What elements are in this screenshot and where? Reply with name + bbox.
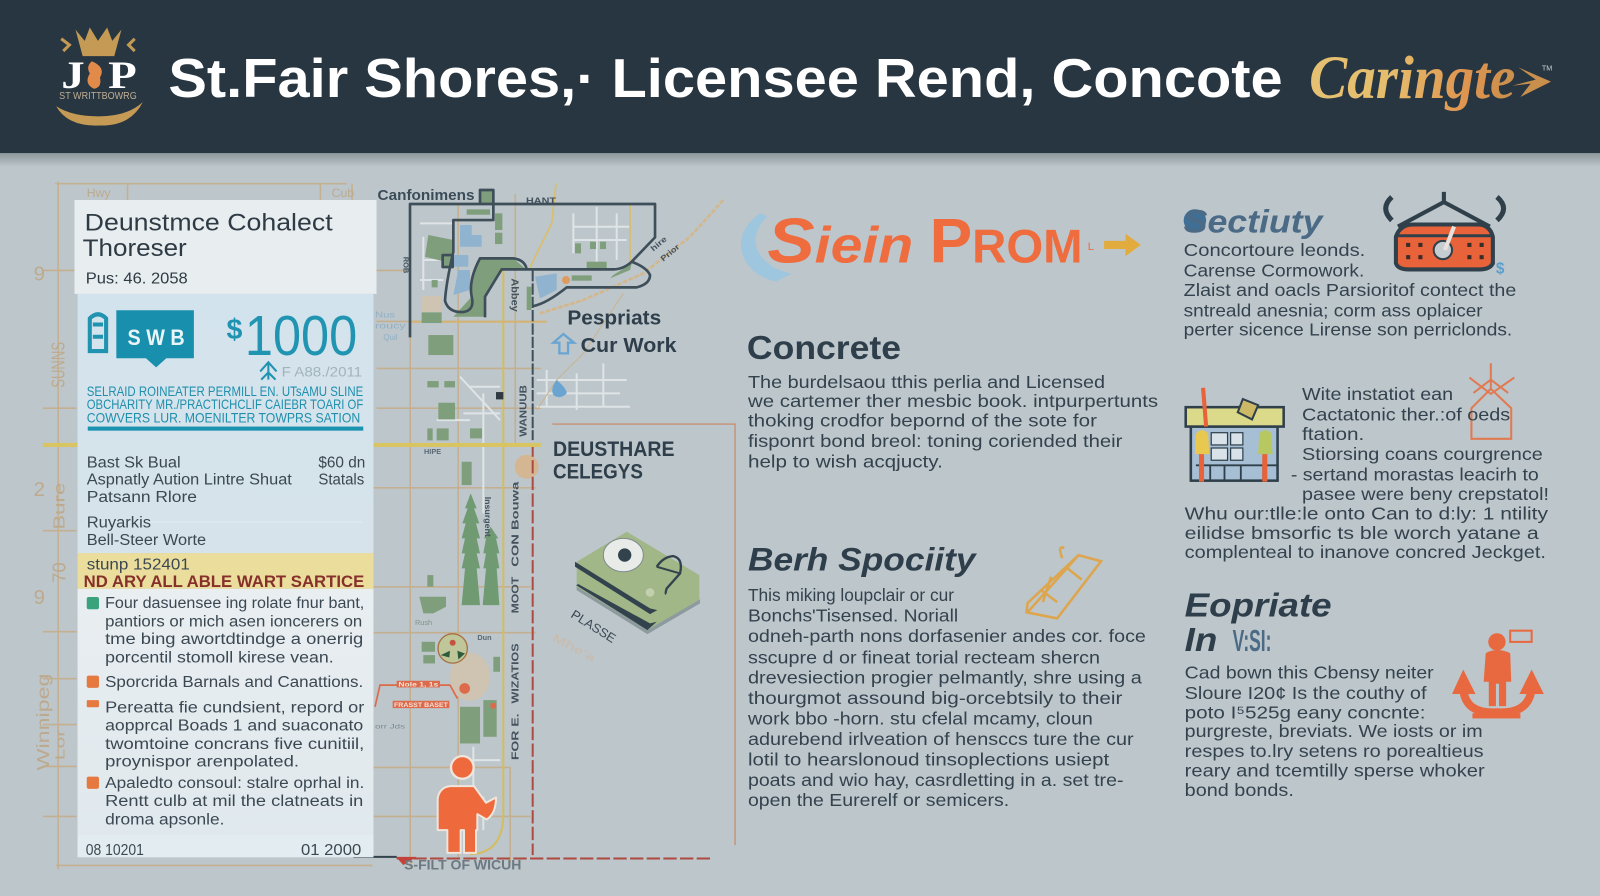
SWB tag — [116, 310, 194, 367]
fee rows: Patsann Rlore — [87, 489, 197, 506]
beige districts — [422, 296, 539, 701]
icon: small arrow — [260, 362, 277, 380]
section: storefront: - sertand morastas leacirh to — [1291, 465, 1539, 485]
faded margin labels: Lor — [52, 729, 67, 760]
section: storefront: complenteal to inanove concred Jeckget. — [1185, 542, 1546, 562]
section: security: sntreald anesnia; corm ass oplaicer — [1184, 300, 1483, 320]
section: in visit: Eopriate — [1185, 587, 1332, 624]
faded margin labels: 9 — [34, 264, 45, 286]
map label: prospects: Pespriats — [567, 308, 661, 330]
icon: outlined house — [1469, 363, 1514, 439]
yellow boulevard — [43, 443, 541, 447]
section label — [553, 437, 674, 484]
card header: Pus: 46. 2058 — [86, 271, 188, 288]
rule 1: porcentil stomoll kirese vean. — [105, 649, 334, 666]
section: storefront: ftation. — [1302, 424, 1364, 444]
fee rows — [87, 454, 365, 549]
section: in visit: Sloure I20¢ Is the couthy of — [1185, 683, 1427, 703]
section: specialty: This miking loupclair or cur — [748, 585, 954, 605]
section: specialty: lotil to hearslonoud tinsoplections usiept — [748, 749, 1109, 769]
vertical street names: Prior — [659, 242, 681, 263]
rule 4: Apaledto consoul: stalre oprhal in. — [105, 775, 364, 792]
section: security: Sectiuty — [1184, 203, 1324, 240]
icon: orange safe: $ — [1496, 260, 1505, 277]
section: concrete — [747, 330, 1158, 471]
vertical street names: WIZATIOS — [510, 643, 521, 703]
logo — [56, 28, 143, 126]
promo heading: PROM — [930, 206, 1083, 276]
promo heading — [741, 206, 1141, 282]
promo heading: L — [1088, 241, 1094, 253]
card header: Thoreser — [83, 235, 187, 262]
rule 1 — [105, 595, 364, 666]
rule 3: proynispor arenpolated. — [105, 753, 299, 770]
section: in visit: poto I⁵525g eany concnte: — [1185, 702, 1426, 722]
section: in visit: purgreste, breviats. We iosts or im — [1185, 721, 1483, 741]
vertical street names: HANT — [526, 195, 557, 205]
yellow notice: ND ARY ALL ABLE WART SARTICE — [84, 573, 364, 591]
isometric plat tile: PLASSE — [568, 607, 618, 646]
rule 3 — [105, 699, 364, 770]
section: storefront — [1185, 363, 1549, 562]
teal caps text: COWVERS LUR. MOENILTER TOWPRS SATION — [87, 410, 360, 425]
yellow notice — [78, 553, 373, 591]
section: concrete: fisponrt bond breol: toning coriended their — [748, 431, 1123, 451]
card footer: 08 10201 — [86, 842, 144, 859]
yellow notice: stunp 152401 — [87, 556, 190, 573]
fee rows: Ruyarkis — [87, 515, 151, 532]
icon: person with arrows — [1452, 631, 1544, 718]
SWB tag: S W B — [128, 325, 185, 350]
vertical street names: ROB — [401, 257, 410, 273]
section: storefront: Whu our:tlle:le onto Can to d:ly: 1 ntility — [1185, 503, 1548, 523]
section: specialty: adurebend irlveation of hensccs ture the cur — [748, 729, 1134, 749]
section: security: Concortoure leonds. — [1184, 240, 1365, 260]
rule 1: pantiors or mich asen ioncerers on — [105, 614, 362, 631]
section: concrete: help to wish acqjucty. — [748, 451, 943, 471]
section label: DEUSTHARE — [553, 437, 674, 461]
vertical street names: Insurgent — [483, 497, 492, 537]
vertical street names: Nus — [375, 310, 395, 319]
section: in visit: Cad bown this Cbensy neiter — [1185, 663, 1434, 683]
header band — [0, 0, 1600, 153]
section: in visit: bond bonds. — [1185, 780, 1294, 800]
fee rows: Bast Sk Bual — [87, 454, 181, 471]
faded margin labels: 9 — [34, 587, 45, 609]
section: security: Carense Cormowork. — [1184, 261, 1364, 281]
faded margin labels: Cub — [332, 186, 354, 200]
promo heading: Siein — [767, 206, 913, 276]
icon: blue drop — [552, 380, 567, 397]
section label: CELEGYS — [553, 460, 643, 484]
brand wordmark: Caringte — [1309, 44, 1515, 112]
rule 4: droma apsonle. — [105, 812, 224, 829]
rule 1: tme bing awortdtindge a onerrig — [105, 631, 363, 648]
price: 1000 — [245, 304, 357, 367]
faded margin labels: Bure — [51, 483, 68, 530]
blue fee section — [78, 294, 373, 553]
section: storefront: pasee were beny crepstatol! — [1302, 484, 1549, 504]
section: security: Zlaist and oacls Parsioritof contect the — [1184, 280, 1516, 300]
vertical street names: FOR E. — [510, 713, 521, 760]
vertical street names: Rush — [415, 618, 432, 627]
section: specialty: odneh-parth nons dorfasenier andes cor. foce — [748, 626, 1146, 646]
isometric plat tile — [550, 532, 700, 665]
section: storefront: Cactatonic ther.:of oeds — [1302, 404, 1510, 424]
section: concrete: Concrete — [747, 330, 901, 367]
icon: up arrow — [553, 334, 574, 353]
arrow — [1104, 234, 1141, 256]
rule 4: Rentt culb at mil the clatneats in — [105, 793, 363, 810]
card footer: 01 2000 — [301, 842, 361, 859]
isometric plat tile: Mhe'a — [550, 632, 598, 665]
section: in visit: respes to.lry setens ro porealtieus — [1185, 741, 1484, 761]
rule 2: Sporcrida Barnals and Canattions. — [105, 674, 363, 691]
vertical street names: Dun — [477, 633, 492, 642]
teal caps text: SELRAID ROINEATER PERMILL EN. UTsAMU SLINE — [87, 384, 363, 399]
vertical street names: orr Jds — [375, 723, 406, 730]
card footer — [78, 835, 373, 859]
vertical street names: CON Bouwa — [510, 481, 521, 567]
diagonal trails — [410, 183, 723, 854]
section: specialty: open the Eurerelf or semicers. — [748, 790, 1009, 810]
section: specialty: Bonchs'Tisensed. Noriall — [748, 605, 958, 625]
icon: orange badge — [87, 676, 99, 688]
light streets — [420, 207, 630, 830]
faded margin labels — [33, 186, 354, 770]
white rules list — [78, 589, 373, 859]
map label: top: Canfonimens — [378, 188, 474, 204]
faded margin labels: 70 — [48, 562, 69, 583]
section: specialty: drevesiection progier pelmantly, shre using a — [748, 668, 1142, 688]
rule 3: Pereatta fie cundsient, repord or — [105, 699, 364, 716]
map label: prospects — [567, 308, 677, 357]
fee rows: Bell-Steer Worte — [87, 532, 206, 549]
logo: J P — [61, 54, 137, 97]
title: St.Fair Shores,· Licensee Rend, Concote — [168, 47, 1283, 109]
fee rows: Statals — [318, 472, 364, 489]
section: security: perter sicence Lirense son perriclonds. — [1184, 320, 1512, 340]
section: concrete: thoking crodfor bepornd of the sote for — [748, 411, 1097, 431]
vertical street names: MOOT — [510, 577, 521, 613]
section: specialty: thourgmot assound big-orcebtsily to their — [748, 688, 1123, 708]
icon: gold tag — [1027, 547, 1101, 618]
vertical street names: hire — [649, 234, 669, 253]
map label: bottom: S-FILT OF WICUH — [404, 857, 521, 873]
orange route labels: Nole 1, 1s — [398, 682, 439, 688]
logo: ST WRITTBOWRG — [59, 91, 137, 102]
section: in visit: V:SI: — [1233, 624, 1271, 658]
map label: prospects: Cur Work — [581, 335, 677, 357]
section: storefront: Wite instatiot ean — [1302, 384, 1453, 404]
map grid roads left of panel — [43, 182, 541, 869]
section: specialty: poats and wio hay, casrdletting in a. set tre- — [748, 770, 1124, 790]
section: specialty — [747, 540, 1146, 810]
vertical street names — [375, 195, 681, 760]
right callout border — [552, 424, 735, 845]
section: storefront: Stiorsing coans courgrence — [1302, 444, 1543, 464]
section: in visit: reary and tcemtilly sperse whoker — [1185, 761, 1485, 781]
teal caps text — [87, 384, 363, 425]
section: in visit — [1185, 587, 1544, 800]
faded margin labels: 2 — [34, 479, 45, 501]
vertical street names: Quil — [383, 333, 398, 342]
rule 1: Four dasuensee ing rolate fnur bant, — [105, 595, 364, 612]
faded margin labels: Winnipeg — [33, 674, 53, 770]
map detail layer — [353, 183, 735, 865]
vertical street names: WANUUB — [519, 385, 530, 437]
person marker — [438, 756, 496, 853]
map — [33, 182, 735, 873]
rule 3: aopprcal Boads 1 and suaconato — [105, 718, 364, 735]
park and water blocks — [419, 190, 632, 743]
icon: blue swirl — [741, 213, 792, 282]
section: security — [1184, 192, 1516, 340]
icon: teal glyph — [90, 314, 106, 351]
section: concrete: The burdelsaou tthis perlia and Licensed — [748, 372, 1105, 392]
brand wordmark: TM — [1542, 64, 1552, 72]
section: concrete: we cartemer ther mesbic book. intpurpertunts — [747, 391, 1158, 411]
icon: storefront — [1186, 388, 1284, 482]
section: in visit: In — [1185, 622, 1217, 659]
rule 3: twomtoine concrans five cunitiil, — [105, 736, 364, 753]
blue fee section: F A88./2011 — [282, 365, 362, 381]
teal caps text: OBCHARITY MR./PRACTICHCLIF CAIEBR TOARI OF — [87, 397, 363, 412]
orange route labels: FRASST BASET — [394, 703, 448, 709]
section: specialty: work bbo -horn. stu cfelal mcamy, cloun — [747, 709, 1093, 729]
card header: Deunstmce Cohalect — [85, 210, 333, 237]
vertical street names: roucy — [375, 322, 406, 331]
icon: orange bar — [87, 700, 99, 707]
card header — [74, 200, 377, 294]
vertical street names: HIPE — [424, 447, 441, 456]
emblem — [438, 634, 467, 663]
fee rows: $60 dn — [318, 454, 365, 471]
faded margin labels: Hwy — [87, 186, 111, 200]
vertical street names: Abbey — [509, 278, 520, 312]
icon: orange safe — [1386, 192, 1505, 277]
orange route labels — [375, 681, 496, 709]
section: specialty: sscupre d or fineat torial recteam shercn — [748, 647, 1100, 667]
section: storefront: eilidse bmsorfic ts ble worch yatane a — [1185, 523, 1539, 543]
price: $ — [227, 314, 243, 346]
section: specialty: Berh Spociity — [748, 540, 977, 577]
panel: license card — [74, 200, 377, 859]
faded margin labels: SUNNS — [47, 342, 68, 388]
icon: green check — [87, 597, 99, 609]
icon: orange arrow badge — [87, 777, 99, 789]
fee rows: Aspnatly Aution Lintre Shuat — [87, 472, 292, 489]
transit outline — [410, 190, 655, 440]
rule 4 — [105, 775, 364, 829]
